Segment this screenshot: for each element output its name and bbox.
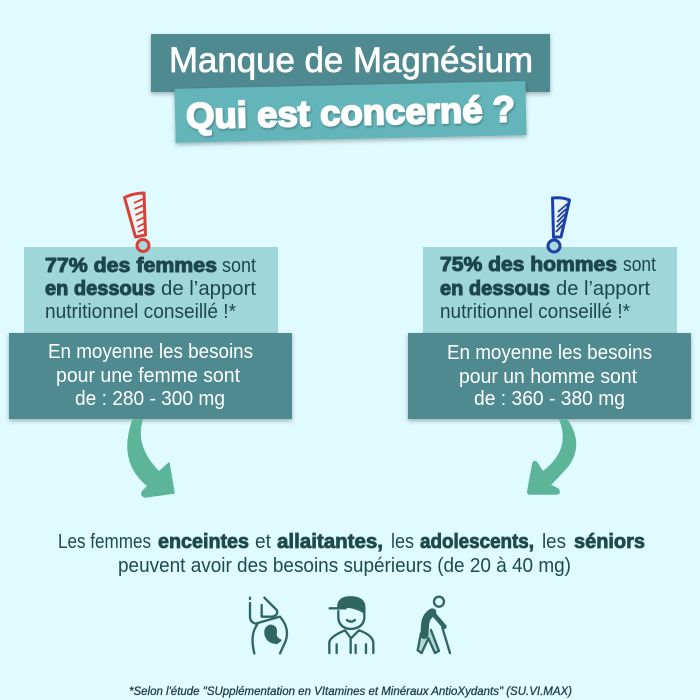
text block: higher needs: les bbox=[391, 531, 414, 553]
light box: women statistic bbox=[24, 247, 278, 333]
light box: men statistic: nutritionnel conseillé !* bbox=[440, 301, 630, 323]
dark box: men needs: En moyenne les besoins bbox=[447, 342, 652, 364]
arrow: women bbox=[128, 420, 174, 497]
title block bbox=[151, 34, 550, 143]
light box: women statistic: sont bbox=[222, 255, 256, 277]
dark box: men needs bbox=[408, 333, 691, 419]
dark box: women needs: pour une femme sont bbox=[56, 365, 240, 387]
text block: higher needs: enceintes bbox=[158, 531, 249, 553]
text block: higher needs: adolescents, bbox=[420, 531, 534, 553]
light box: men statistic: de l’apport bbox=[556, 278, 650, 300]
text block: higher needs: Les femmes bbox=[58, 531, 151, 553]
icon: senior with cane bbox=[418, 597, 450, 653]
light box: men statistic: en dessous bbox=[440, 278, 550, 300]
light box: women statistic: de l’apport bbox=[161, 278, 256, 300]
subtitle: Qui est concerné ?: Qui est concerné ? bbox=[186, 88, 515, 137]
dark box: men needs: de : 360 - 380 mg bbox=[474, 388, 625, 410]
text block: higher needs: les bbox=[542, 531, 566, 553]
title: Manque de Magnésium: Manque de Magnésium bbox=[169, 41, 533, 80]
icon: pregnant woman bbox=[250, 598, 287, 653]
arrow: men bbox=[528, 420, 576, 494]
text block: higher needs: séniors bbox=[574, 531, 645, 553]
footnote: *Selon l'étude "SUpplémentation en VItamines et Minéraux AntioXydants" (SU.VI.MAX) bbox=[129, 684, 572, 698]
light box: men statistic bbox=[423, 247, 677, 333]
light box: men statistic: 75% des hommes bbox=[440, 254, 617, 276]
text block: higher needs: allaitantes, bbox=[277, 531, 383, 553]
text block: higher needs: peuvent avoir des besoins supérieurs (de 20 à 40 mg) bbox=[118, 555, 571, 577]
light box: women statistic: 77% des femmes bbox=[45, 255, 217, 277]
light box: women statistic: en dessous bbox=[45, 278, 155, 300]
light box: women statistic: nutritionnel conseillé !* bbox=[45, 301, 236, 323]
text block: higher needs: et bbox=[255, 531, 271, 553]
panel: men bbox=[408, 198, 691, 494]
dark box: women needs: En moyenne les besoins bbox=[48, 341, 253, 363]
icon: blue exclamation mark bbox=[548, 198, 570, 252]
title: Manque de Magnésium bbox=[151, 34, 550, 92]
dark box: women needs: de : 280 - 300 mg bbox=[75, 388, 225, 410]
icon: teenager with cap bbox=[329, 597, 373, 653]
icon: red exclamation mark bbox=[124, 193, 149, 252]
light box: men statistic: sont bbox=[623, 254, 656, 276]
dark box: women needs bbox=[9, 333, 292, 419]
panel: women bbox=[9, 193, 292, 497]
text block: higher needs bbox=[58, 531, 645, 577]
dark box: men needs: pour un homme sont bbox=[459, 366, 637, 388]
